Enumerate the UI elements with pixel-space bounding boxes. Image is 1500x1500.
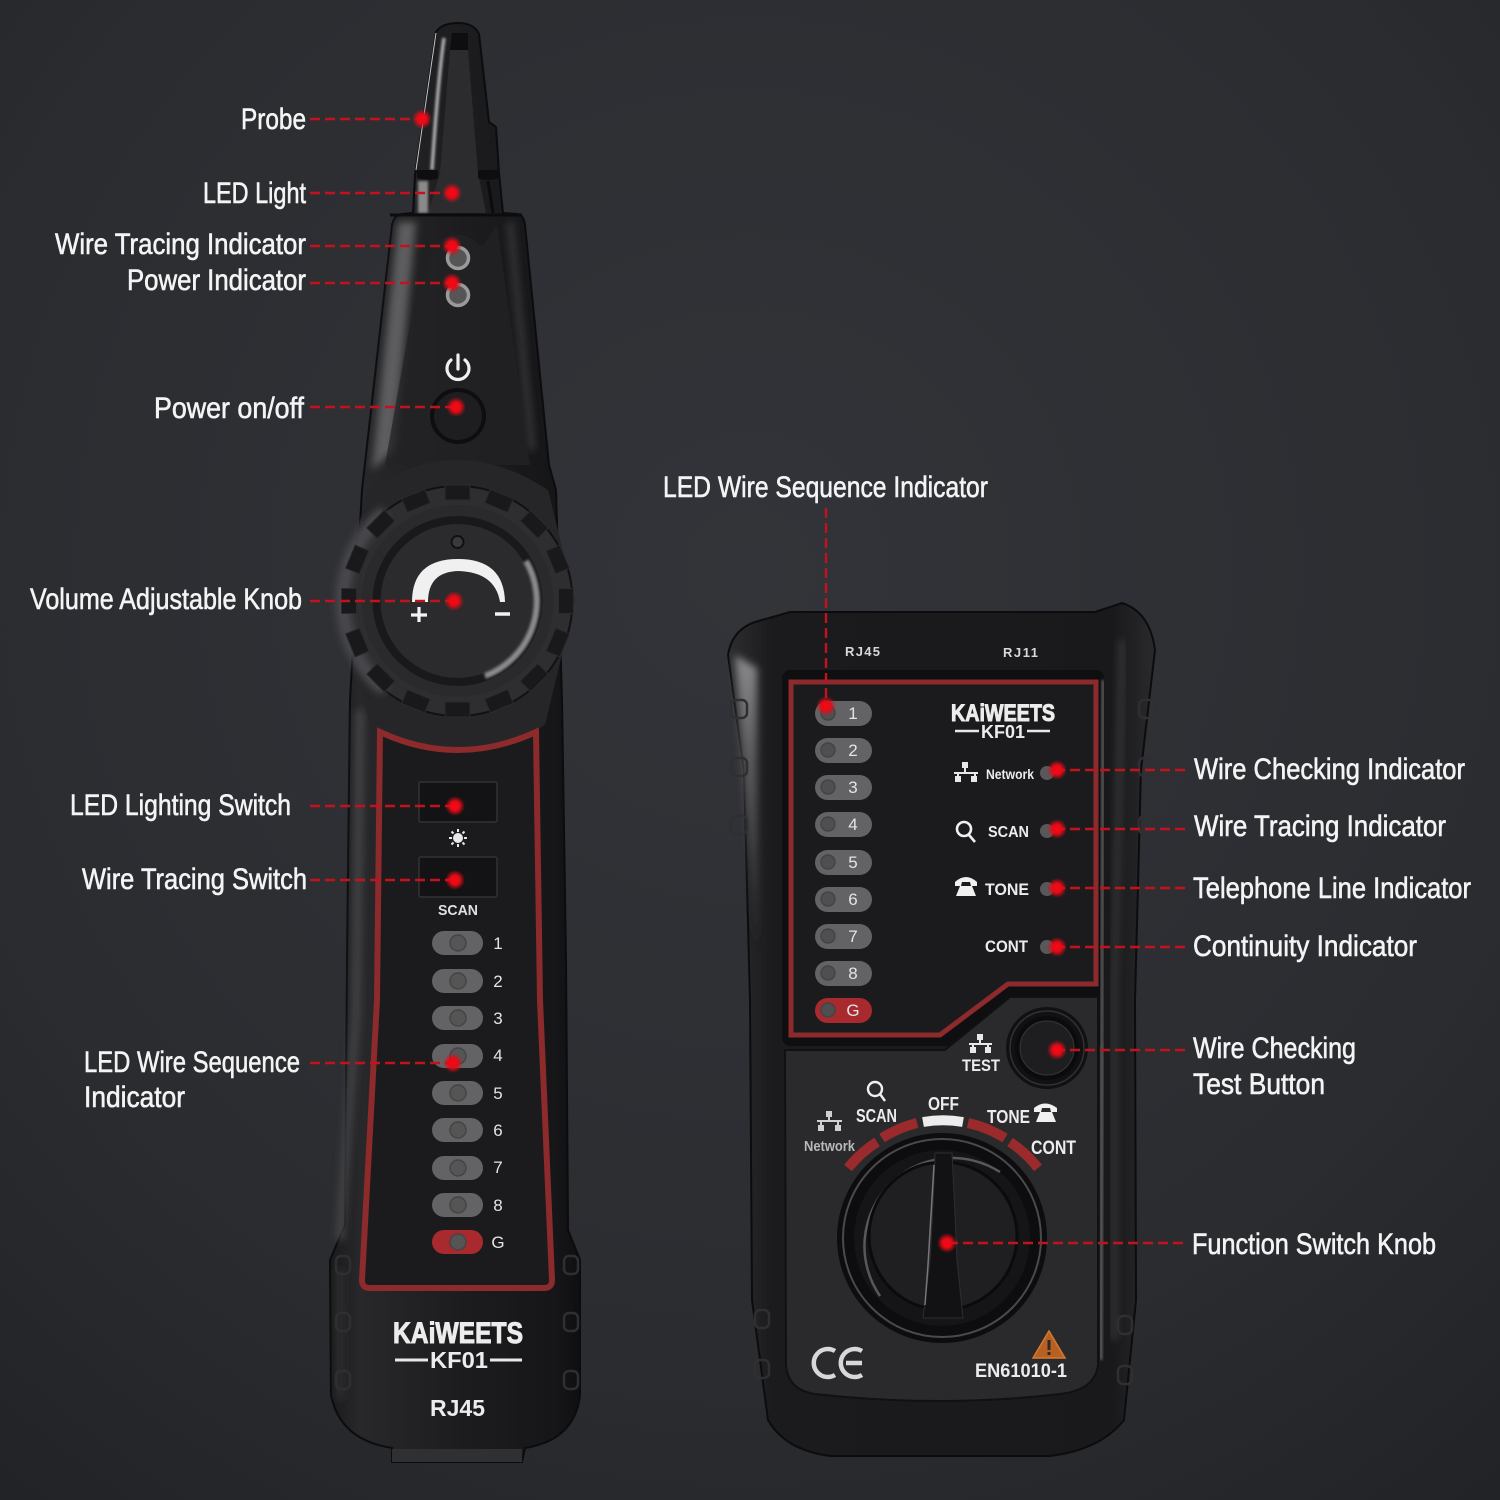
indicator LEDs [1040,766,1054,954]
brand: KAIWEETS KF01: KAiWEETS [951,700,1055,727]
callout: LED Light [203,177,462,210]
callout: Wire Tracing Indicator: Wire Tracing Indicator [55,228,306,261]
callout: Continuity Indicator [1047,930,1417,963]
callout: Telephone Line Indicator [1047,872,1471,905]
body highlights [340,222,532,1400]
icon: power symbol [447,355,469,379]
test label [962,1034,1001,1075]
callout: Wire Checking Indicator [1047,753,1465,786]
network label: Network [986,766,1034,782]
wire sequence pills: 4 [848,815,858,834]
test label: TEST [962,1056,1001,1075]
test button [1006,1007,1088,1089]
connector [392,1449,522,1462]
callout: Power on/off: Power on/off [154,392,305,425]
callout: Wire Tracing Switch: Wire Tracing Switch [82,863,307,896]
standard label: EN61010-1 [975,1361,1067,1382]
probe body [330,23,580,1462]
power LED [448,284,468,306]
callout: Volume Adjustable Knob: Volume Adjustable Knob [30,583,302,616]
callout: Wire Tracing Indicator [1047,810,1446,843]
wire sequence pills: 1 [848,704,858,723]
port labels [845,644,1038,660]
callout: Wire Checking Test Button [1047,1032,1356,1101]
receiver highlights [735,640,1122,1340]
edge highlight [1101,680,1103,1360]
scan label: SCAN [988,824,1029,841]
function switch knob [837,1133,1047,1343]
probe tip detail [390,33,522,215]
callout: Wire Tracing Switch [82,863,465,896]
callout: Probe [241,103,432,136]
callout: LED Wire Sequence Indicator: LED Wire Sequence Indicator [663,471,988,504]
function labels [804,1082,1076,1159]
LED wire sequence pills: 8 [493,1196,503,1215]
function labels: TONE [987,1107,1030,1127]
cont label: CONT [985,937,1029,956]
callout: Wire Checking Test Button: Test Button [1193,1068,1325,1101]
callout: LED Wire Sequence Indicator: Indicator [84,1081,185,1114]
RJ45 port label: RJ45 [430,1395,485,1421]
callout: Power Indicator [127,264,462,297]
wire sequence pills [815,701,872,1023]
icon: telephone [955,877,977,896]
power button [430,388,486,444]
icon: network [954,762,978,782]
tone label: TONE [985,880,1029,899]
lower face plate [785,997,1098,1401]
CE mark [814,1349,862,1377]
LED wire sequence pills: 7 [493,1158,503,1177]
wire sequence pills: 3 [848,778,858,797]
callout: LED Lighting Switch: LED Lighting Switch [70,789,291,822]
device: receiver [728,603,1155,1456]
callout: LED Light: LED Light [203,177,307,210]
callout: Power on/off [154,392,466,425]
callout: Function Switch Knob [937,1228,1436,1261]
port labels: RJ11 [1003,645,1038,660]
brand: KAIWEETS KF01: KAiWEETS [393,1317,523,1350]
LED lighting switch [419,782,497,822]
function labels: Network [804,1138,856,1155]
port labels: RJ45 [845,644,880,659]
side grip notches [336,1256,578,1389]
LED wire sequence pills: 3 [493,1009,503,1028]
wire tracing LED [448,248,468,268]
function labels: OFF [928,1094,959,1114]
brand: KAIWEETS KF01 [393,1317,523,1373]
callout: LED Wire Sequence Indicator [663,471,988,716]
red outline panel [362,732,552,1288]
red outline panel [791,682,1096,1035]
function labels: CONT [1031,1138,1076,1159]
side grip notches [731,700,1155,1384]
LED wire sequence pills: G [491,1233,505,1252]
LED wire sequence pills: 1 [493,934,503,953]
wire sequence pills: 8 [848,964,858,983]
brand: KAIWEETS KF01: KF01 [430,1347,488,1373]
LED wire sequence pills: 5 [493,1084,503,1103]
wire sequence pills: 7 [848,927,858,946]
LED wire sequence pills [432,931,505,1254]
function labels: SCAN [856,1106,897,1126]
callouts: tracer probe [30,103,466,1114]
icon: magnifier [957,822,975,842]
callout: Wire Tracing Indicator: Wire Tracing Indicator [1194,810,1446,843]
upper panel [385,225,530,465]
LED wire sequence pills: 4 [493,1046,503,1065]
device: tracer probe [330,23,580,1462]
wire sequence pills: 2 [848,741,858,760]
callout: LED Wire Sequence Indicator [84,1046,463,1114]
callout: LED Wire Sequence Indicator: LED Wire Sequence [84,1046,300,1079]
icon: sun [449,829,467,847]
callout: Wire Checking Test Button: Wire Checking [1193,1032,1356,1065]
LED wire sequence pills: 2 [493,972,503,991]
callout: Probe: Probe [241,103,306,136]
brand: KAIWEETS KF01: KF01 [981,722,1025,742]
LED wire sequence pills: 6 [493,1121,503,1140]
volume knob [340,460,575,750]
warning triangle [1033,1331,1065,1358]
wire tracing switch [419,857,497,897]
callout: Continuity Indicator: Continuity Indicator [1193,930,1417,963]
wire sequence pills: 6 [848,890,858,909]
function scale arcs [848,1120,1038,1168]
brand: KAIWEETS KF01 [951,700,1055,742]
wire sequence pills: G [846,1001,860,1020]
callout: Power Indicator: Power Indicator [127,264,306,297]
callouts: receiver [663,471,1471,1261]
wire sequence pills: 5 [848,853,858,872]
scan text: SCAN [438,902,478,919]
callout: Function Switch Knob: Function Switch Knob [1192,1228,1436,1261]
recessed top panel [782,670,1104,1046]
callout: LED Lighting Switch [70,789,465,822]
receiver body [728,603,1155,1456]
